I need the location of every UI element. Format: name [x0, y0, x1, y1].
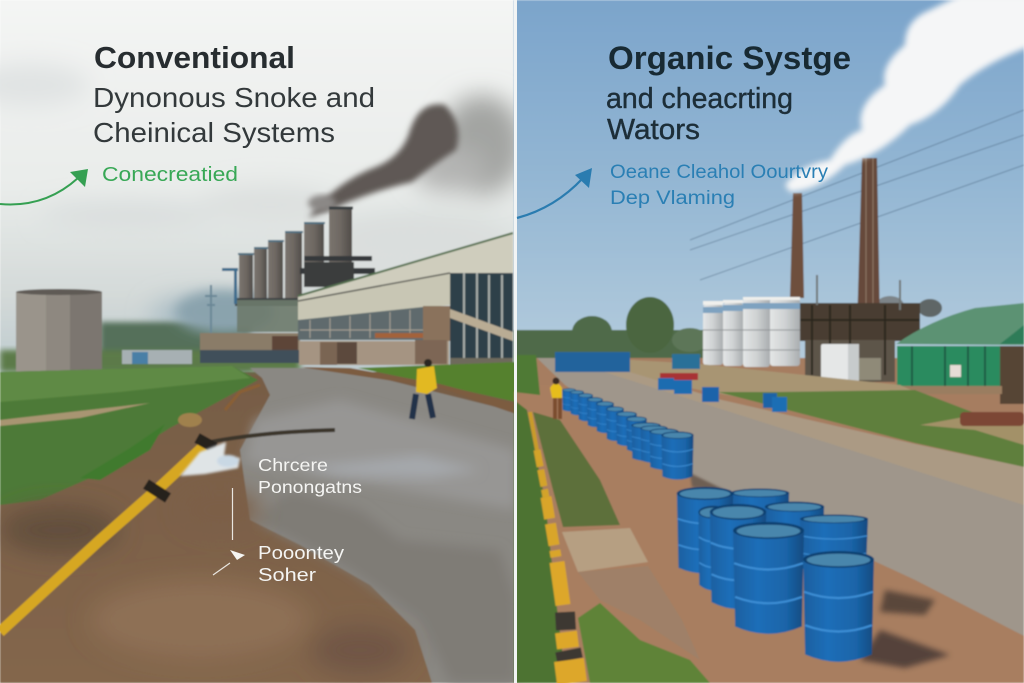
- brick pavement and shadows: [514, 385, 1024, 683]
- worker in yellow jacket: [412, 359, 437, 419]
- white steam plume: [785, 0, 1024, 192]
- road annotation two: Pooontey: [258, 543, 344, 563]
- blue label: [610, 162, 829, 209]
- low plant buildings: [122, 300, 300, 364]
- far blue drums: [555, 352, 787, 412]
- right subtitle: Wators: [607, 114, 700, 146]
- left subtitle: Dynonous Snoke and: [93, 82, 375, 113]
- white foam spill: [180, 442, 240, 476]
- receding row of drums: [562, 388, 694, 480]
- green shed: [896, 303, 1024, 404]
- brick chimneys: [790, 158, 880, 328]
- road annotation one: [258, 455, 362, 497]
- concrete road: [240, 362, 516, 683]
- panel: conventional system scene: [0, 0, 524, 683]
- round concrete tank: [16, 289, 102, 372]
- grass field: [0, 366, 258, 505]
- left heading block: [93, 40, 375, 148]
- yellow pipeline: [0, 385, 335, 632]
- blue label: Dep Vlaming: [610, 188, 735, 209]
- road annotation two: Soher: [258, 565, 316, 585]
- foreground blue drums: [677, 487, 874, 662]
- industrial silos: [205, 208, 375, 337]
- right subtitle: and cheacrting: [606, 83, 793, 115]
- large white tank: [821, 344, 881, 383]
- distant trees: [514, 296, 942, 358]
- slab pads: [562, 528, 700, 660]
- right subtitle: [606, 83, 793, 146]
- road annotation two: [258, 543, 344, 585]
- yellow and black curb: [530, 412, 572, 683]
- worker at roadside: [550, 378, 562, 419]
- dirt tones: [0, 490, 410, 676]
- road annotation one: Ponongatns: [258, 477, 362, 497]
- dark smoke plume: [308, 95, 524, 218]
- annotation pointer: [213, 488, 245, 575]
- left heading block: Conventional: [94, 40, 295, 75]
- factory hall: [298, 233, 513, 366]
- storage tanks: [703, 297, 800, 367]
- panel: organic system scene: [514, 0, 1024, 683]
- right-hand ground: [570, 358, 1024, 508]
- blue label: Oeane Cleahol Oourtvry: [610, 162, 829, 183]
- paved road: [537, 358, 1024, 636]
- road annotation one: Chrcere: [258, 455, 328, 475]
- background haze and trees: [0, 290, 300, 372]
- power lines: [690, 110, 1024, 280]
- steel process structure: [800, 275, 920, 382]
- right heading block: [606, 40, 851, 146]
- blue arrow: [517, 168, 592, 218]
- green arrow: [0, 169, 88, 204]
- green label: Conecreatied: [102, 164, 238, 186]
- left subtitle: [93, 82, 375, 148]
- divider between panels: [514, 0, 517, 683]
- right heading block: Organic Systge: [608, 40, 851, 76]
- left subtitle: Cheinical Systems: [93, 117, 335, 148]
- verge grass: [514, 355, 710, 683]
